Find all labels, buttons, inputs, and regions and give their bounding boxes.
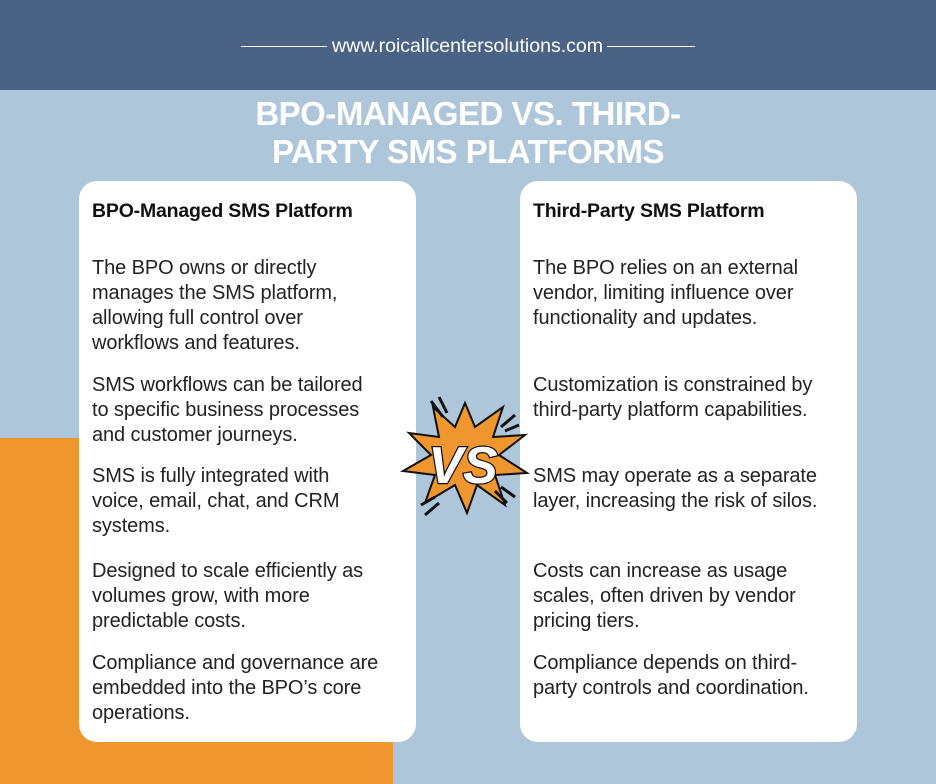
- text block left: manages the SMS platform,: [92, 282, 337, 304]
- panel: third-party: party controls and coordination.: [533, 677, 809, 699]
- panel: third-party: third-party platform capabilities.: [533, 399, 808, 421]
- heading left: BPO-Managed SMS Platform: [92, 200, 353, 222]
- panel: BPO-managed: embedded into the BPO’s core: [92, 677, 361, 699]
- text block left: The BPO owns or directly: [92, 257, 316, 279]
- panel: third-party: scales, often driven by vendor: [533, 585, 796, 607]
- panel: third-party: layer, increasing the risk of silos.: [533, 490, 817, 512]
- panel: BPO-managed: SMS is fully integrated with: [92, 465, 329, 487]
- text block left: workflows and features.: [92, 332, 300, 354]
- icon: VS burst: VS: [428, 437, 498, 495]
- panel: BPO-managed: SMS workflows can be tailored: [92, 374, 363, 396]
- website url: www.roicallcentersolutions.com: [332, 35, 603, 57]
- title: BPO-MANAGED VS. THIRD-: [255, 95, 681, 132]
- panel: BPO-managed: operations.: [92, 702, 190, 724]
- icon: VS burst: [400, 396, 530, 516]
- panel: BPO-managed: volumes grow, with more: [92, 585, 310, 607]
- header band: [0, 0, 936, 90]
- panel: third-party: pricing tiers.: [533, 610, 639, 632]
- panel: BPO-managed: and customer journeys.: [92, 424, 298, 446]
- title: PARTY SMS PLATFORMS: [272, 133, 664, 170]
- background orange shape: [0, 438, 393, 784]
- panel: BPO-managed: Designed to scale efficiently as: [92, 560, 363, 582]
- text block left: allowing full control over: [92, 307, 303, 329]
- panel: BPO-managed: [79, 181, 416, 742]
- text block right: vendor, limiting influence over: [533, 282, 793, 304]
- panel: third-party: Compliance depends on third-: [533, 652, 797, 674]
- title: [255, 95, 681, 170]
- heading right: Third-Party SMS Platform: [533, 200, 764, 222]
- panel: third-party: [520, 181, 857, 742]
- panel: BPO-managed: to specific business processes: [92, 399, 359, 421]
- text block left: [92, 257, 337, 354]
- panel: third-party: Customization is constrained by: [533, 374, 812, 396]
- panel: third-party: Costs can increase as usage: [533, 560, 787, 582]
- panel: BPO-managed: Compliance and governance are: [92, 652, 378, 674]
- text block right: functionality and updates.: [533, 307, 757, 329]
- panel: BPO-managed: predictable costs.: [92, 610, 246, 632]
- text block right: [533, 257, 798, 329]
- panel: third-party: SMS may operate as a separate: [533, 465, 817, 487]
- text block right: The BPO relies on an external: [533, 257, 798, 279]
- panel: BPO-managed: voice, email, chat, and CRM: [92, 490, 339, 512]
- panel: BPO-managed: systems.: [92, 515, 170, 537]
